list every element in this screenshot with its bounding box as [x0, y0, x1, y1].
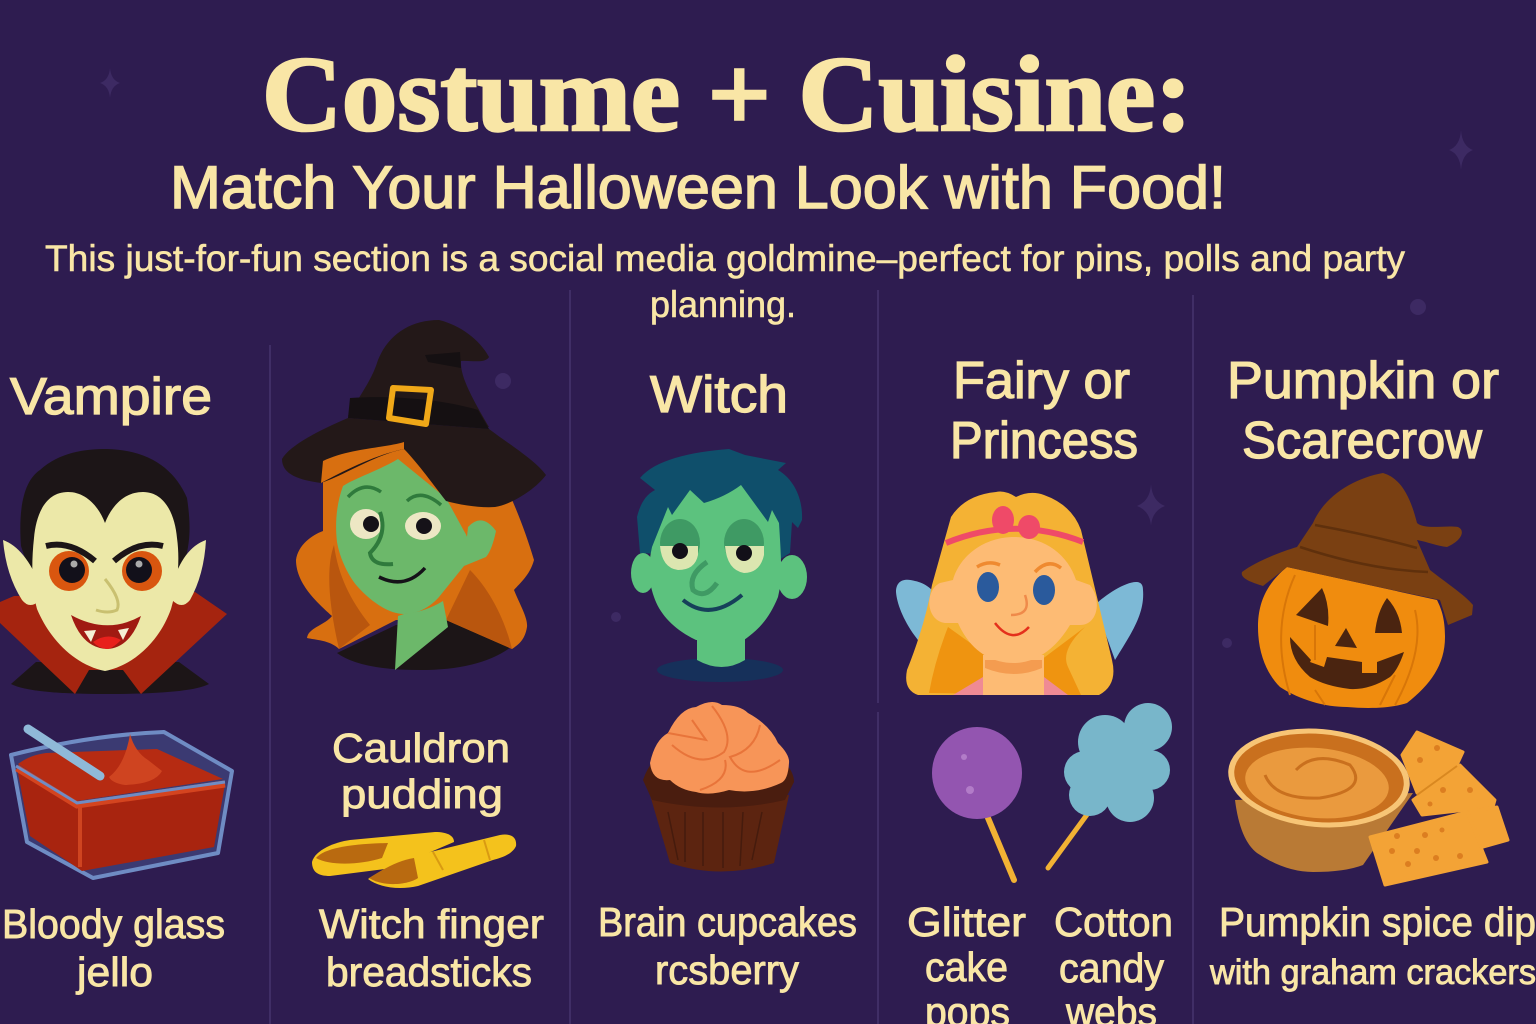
heading: pumpkin or scarecrow — [1227, 352, 1499, 470]
label: brain cupcakes raspberry: rcsberry — [655, 947, 799, 993]
label: glitter cake pops — [907, 899, 1026, 1024]
heading: witch: Witch — [650, 366, 788, 424]
panel: witch — [282, 320, 546, 995]
label: bloody glass jello: jello — [76, 949, 153, 995]
label: cauldron pudding: pudding — [341, 771, 503, 817]
description — [45, 238, 1405, 325]
label: pumpkin spice dip with graham crackers: with graham crackers — [1209, 953, 1536, 992]
label: cotton candy webs — [1054, 899, 1173, 1024]
panel: fairy or princess — [896, 352, 1173, 1024]
subtitle: Match Your Halloween Look with Food! — [170, 154, 1226, 221]
icon: glitter cake pop — [932, 727, 1022, 880]
label: bloody glass jello: Bloody glass — [2, 901, 225, 947]
heading: vampire: Vampire — [10, 368, 212, 426]
heading: fairy or princess — [950, 352, 1138, 470]
label: glitter cake pops: cake — [925, 944, 1008, 990]
icon: cotton candy — [1048, 703, 1172, 868]
label: glitter cake pops: Glitter — [907, 899, 1026, 945]
panel: pumpkin or scarecrow — [1209, 352, 1536, 992]
icon: pumpkin dip with graham crackers — [1224, 721, 1508, 885]
label: witch finger breadsticks: Witch finger — [319, 901, 544, 947]
label: cotton candy webs: candy — [1059, 945, 1164, 991]
description: planning. — [650, 284, 796, 325]
description: This just-for-fun section is a social media goldmine–perfect for pins, polls and party — [45, 238, 1405, 279]
heading: fairy or princess: Fairy or — [953, 352, 1130, 410]
label: cauldron pudding: Cauldron — [332, 725, 510, 771]
panel: zombie labelled witch — [598, 366, 857, 993]
label: brain cupcakes raspberry: Brain cupcakes — [598, 899, 857, 945]
heading: pumpkin or scarecrow: Scarecrow — [1242, 412, 1482, 470]
icon: bloody jello dish — [11, 729, 232, 878]
icon: vampire face — [0, 449, 227, 694]
label: cauldron pudding — [332, 725, 510, 817]
icon: witch — [282, 320, 546, 670]
label: bloody glass jello — [2, 901, 225, 995]
heading: pumpkin or scarecrow: Pumpkin or — [1227, 352, 1499, 410]
label: brain cupcakes raspberry — [598, 899, 857, 993]
heading: fairy or princess: Princess — [950, 412, 1138, 470]
label: cotton candy webs: Cotton — [1054, 899, 1173, 945]
icon: witch finger breadsticks — [312, 832, 516, 888]
icon: green-faced character — [631, 449, 807, 682]
title: Costume + Cuisine: — [262, 36, 1192, 154]
icon: jack-o-lantern with hat — [1242, 473, 1473, 708]
icon: brain cupcake — [643, 702, 794, 872]
label: witch finger breadsticks: breadsticks — [326, 949, 532, 995]
icon: fairy — [896, 492, 1143, 695]
label: witch finger breadsticks — [319, 901, 544, 995]
panel: vampire — [0, 368, 232, 995]
label: pumpkin spice dip with graham crackers — [1209, 899, 1536, 992]
